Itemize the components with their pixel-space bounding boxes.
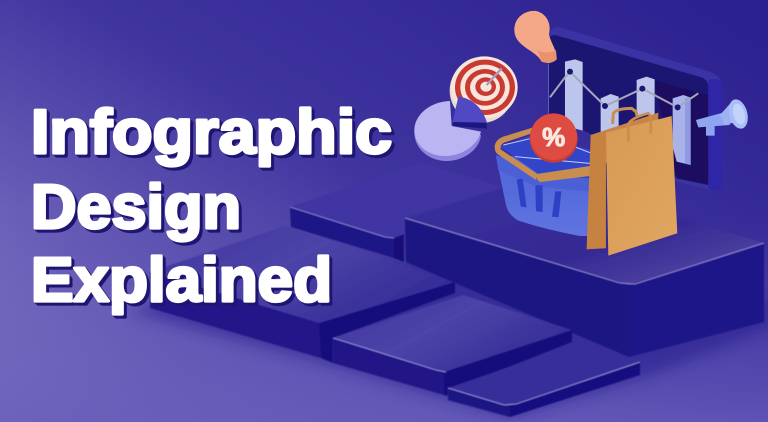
- title: Infographic: [31, 98, 392, 167]
- chart: bar columns: [550, 59, 698, 165]
- icon: shopping bag: [587, 108, 677, 256]
- panel: middle platform: [333, 295, 572, 396]
- illustration: objects on main platform: [414, 11, 751, 256]
- icon: shopping basket: [495, 127, 592, 236]
- chart: pie chart: [414, 97, 487, 161]
- platform shadows: [130, 250, 768, 418]
- panel: large left platform: [150, 226, 455, 363]
- panel: front platform: [448, 343, 640, 417]
- icon: light bulb: [514, 11, 557, 113]
- title: [31, 98, 392, 315]
- icon: megaphone: [696, 97, 751, 136]
- icon: target: [450, 56, 518, 123]
- panel: main platform: [405, 176, 764, 357]
- title: Explained: [31, 246, 332, 315]
- panel: back-left platform: [290, 162, 560, 262]
- title: Design: [31, 173, 241, 242]
- icon: percent badge: %: [542, 122, 565, 152]
- icon: monitor board: [549, 27, 722, 191]
- icon: percent badge: [530, 113, 578, 163]
